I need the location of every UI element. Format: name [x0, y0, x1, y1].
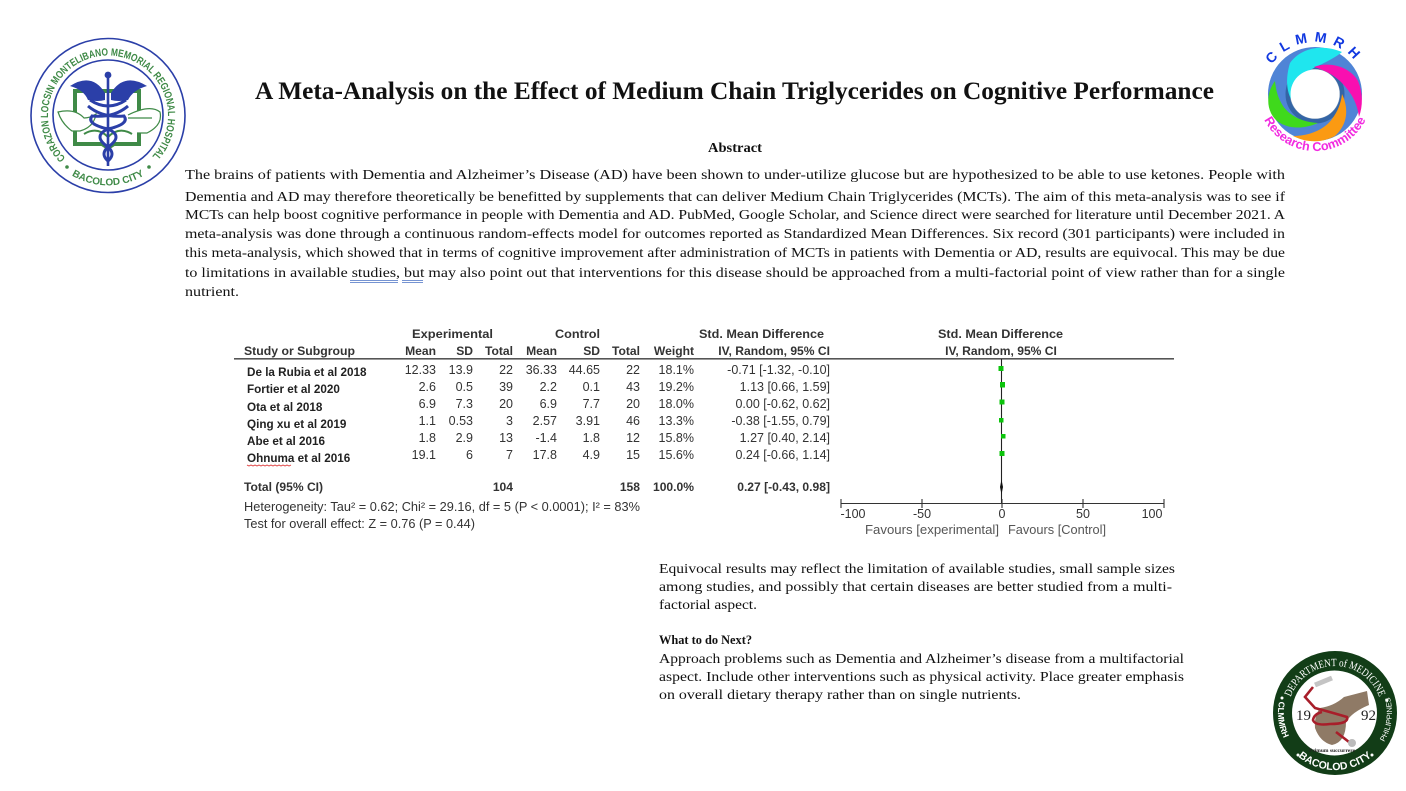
logo: department of medicine: 92 [1361, 708, 1376, 724]
study rows: 6 [466, 448, 473, 462]
total row: 100.0% [653, 480, 694, 494]
study rows: Ota et al 2018 [247, 401, 323, 414]
abstract text: nutrient. [185, 284, 239, 299]
study rows: 20 [626, 397, 640, 411]
study rows: 19.1 [412, 448, 436, 462]
what to do next text: Approach problems such as Dementia and Alzheimer’s disease from a multifactorial [659, 651, 1184, 666]
study rows: 7.7 [583, 397, 600, 411]
study rows: 2.57 [533, 414, 557, 428]
study rows: 3 [506, 414, 513, 428]
study rows: 39 [499, 380, 513, 394]
dept top text: DEPARTMENT of MEDICINE [1284, 658, 1386, 697]
study rows: 2.2 [540, 380, 557, 394]
study rows: 6.9 [419, 397, 436, 411]
abstract text: meta-analysis was done through a continuous random-effects model for outcomes reported as Standardized Mean Differences. Six record (301 participants) were included in [185, 226, 1285, 242]
seal caduceus [70, 76, 147, 166]
title: A Meta-Analysis on the Effect of Medium Chain Triglycerides on Cognitive Performance [255, 78, 1214, 105]
dept left text: CLMMRH [1278, 702, 1289, 738]
study rows: Abe et al 2016 [247, 435, 325, 448]
abstract text: MCTs can help boost cognitive performance in people with Dementia and AD. PubMed, Google Scholar, and Science direct were searched for literature until December 2021. A [185, 207, 1285, 222]
seal mortar [128, 109, 160, 133]
study rows: 13.9 [449, 363, 473, 377]
forest plot table: Control [555, 327, 600, 341]
study rows: 1.1 [419, 414, 436, 428]
axis [841, 499, 1164, 508]
heterogeneity note: Heterogeneity: Tau² = 0.62; Chi² = 29.16, df = 5 (P < 0.0001); I² = 83% [244, 500, 640, 514]
study rows: 44.65 [569, 363, 600, 377]
study rows: 22 [626, 363, 640, 377]
study rows: Qing xu et al 2019 [247, 418, 347, 431]
study rows: 19.2% [659, 380, 694, 394]
study rows: -0.71 [-1.32, -0.10] [727, 363, 830, 377]
forest plot table: Std. Mean Difference [938, 327, 1063, 341]
study rows: 18.1% [659, 363, 694, 377]
total row: Total (95% CI) [244, 480, 323, 494]
interpretation text: Equivocal results may reflect the limitation of available studies, small sample sizes [659, 561, 1175, 576]
abstract text: to limitations in available studies, but may also point out that interventions for this disease should be approached from a multi-factorial point of view rather than for a single [185, 265, 1285, 280]
interpretation text: factorial aspect. [659, 597, 757, 612]
study rows: De la Rubia et al 2018 [247, 366, 367, 379]
seal lamp [58, 111, 96, 131]
study rows: 20 [499, 397, 513, 411]
study rows: 2.6 [419, 380, 436, 394]
study rows: 13.3% [659, 414, 694, 428]
orange segment [1293, 94, 1346, 141]
study rows: 0.1 [583, 380, 600, 394]
study rows: 36.33 [526, 363, 557, 377]
forest plot table [234, 327, 1174, 531]
pooled diamond [1000, 480, 1003, 494]
total row: 158 [620, 480, 640, 494]
seal city text: BACOLOD CITY [72, 169, 142, 186]
study rows: 0.5 [456, 380, 473, 394]
study rows: Fortier et al 2020 [247, 383, 340, 396]
study rows: 18.0% [659, 397, 694, 411]
logo: hospital seal [30, 38, 186, 194]
axis labels: 50 [1076, 507, 1090, 521]
axis labels: 100 [1142, 507, 1162, 521]
hands [1315, 691, 1369, 745]
axis labels: 0 [999, 507, 1006, 521]
interpretation text: among studies, and possibly that certain diseases are better studied from a multi- [659, 579, 1172, 594]
study rows: 1.8 [419, 431, 436, 445]
axis labels: -100 [840, 507, 866, 521]
study rows: Ohnuma et al 2016 [247, 452, 351, 465]
study rows: 15 [626, 448, 640, 462]
what to do next heading: What to do Next? [659, 632, 752, 647]
study rows: 12 [626, 431, 640, 445]
forest plot table: Std. Mean Difference [699, 327, 824, 341]
cyan segment [1287, 48, 1342, 99]
overall effect note: Test for overall effect: Z = 0.76 (P = 0.44) [244, 517, 475, 531]
abstract text [185, 167, 1285, 299]
abstract text: The brains of patients with Dementia and Alzheimer’s Disease (AD) have been shown to under-utilize glucose but are hypothesized to be able to use ketones. People with [185, 167, 1285, 183]
green segment [1268, 81, 1318, 128]
abstract heading: Abstract [708, 140, 763, 155]
total row [244, 480, 830, 494]
total row: 104 [493, 480, 513, 494]
favours labels: Favours [experimental] [865, 523, 999, 537]
study rows: 17.8 [533, 448, 557, 462]
axis labels [840, 507, 1162, 521]
column headers: Weight [654, 344, 694, 358]
favours labels [865, 523, 1106, 537]
abstract text: Dementia and AD may therefore theoretically be benefitted by supplements that can deliver Medium Chain Triglycerides (MCTs). The aim of this meta-analysis was to see if [185, 189, 1285, 205]
forest plot chart [840, 359, 1164, 537]
column headers: SD [456, 344, 473, 358]
column headers: Mean [526, 344, 557, 358]
motto: Primum succurrere [1309, 748, 1356, 754]
study rows: 0.00 [-0.62, 0.62] [735, 397, 830, 411]
study rows: 15.8% [659, 431, 694, 445]
study rows: 43 [626, 380, 640, 394]
CLMMRH text: CLMMRH [1266, 32, 1360, 62]
column headers: Total [485, 344, 513, 358]
study rows: 0.53 [449, 414, 473, 428]
dept right text: PHILIPPINES [1380, 698, 1392, 742]
Research Committee text: Research Committee [1264, 116, 1365, 152]
what to do next text: aspect. Include other interventions such as physical activity. Place greater emphasis [659, 669, 1184, 684]
what to do next text: on overall dietary therapy rather than on single nutrients. [659, 687, 1021, 702]
abstract text: this meta-analysis, which showed that in terms of cognitive improvement after administration of MCTs in patients with Dementia or AD, results are equivocal. This may be due [185, 245, 1285, 260]
group headers: Experimental [412, 327, 493, 341]
study rows: 4.9 [583, 448, 600, 462]
column headers: IV, Random, 95% CI [718, 344, 830, 358]
study rows: 2.9 [456, 431, 473, 445]
column headers: Total [612, 344, 640, 358]
column headers [244, 344, 1057, 358]
stethoscope [1305, 687, 1349, 742]
study markers [998, 366, 1006, 456]
study rows: 1.13 [0.66, 1.59] [740, 380, 830, 394]
study rows: 1.27 [0.40, 2.14] [740, 431, 830, 445]
study rows: 3.91 [576, 414, 600, 428]
dept bottom text: BACOLOD CITY [1298, 750, 1370, 770]
study rows: 13 [499, 431, 513, 445]
study rows: 12.33 [405, 363, 436, 377]
study rows: 7.3 [456, 397, 473, 411]
study rows: 1.8 [583, 431, 600, 445]
study rows: 7 [506, 448, 513, 462]
favours labels: Favours [Control] [1008, 523, 1106, 537]
study rows: -0.38 [-1.55, 0.79] [731, 414, 830, 428]
column headers: Study or Subgroup [244, 344, 355, 358]
interpretation text [659, 561, 1175, 612]
study rows: 15.6% [659, 448, 694, 462]
study rows: 22 [499, 363, 513, 377]
total row: 0.27 [-0.43, 0.98] [737, 480, 830, 494]
column headers: SD [583, 344, 600, 358]
seal book [75, 91, 139, 148]
logo: research committee [1264, 32, 1365, 152]
study rows: 6.9 [540, 397, 557, 411]
logo: department of medicine [1273, 651, 1397, 775]
year: 19 [1296, 708, 1311, 724]
study rows: 46 [626, 414, 640, 428]
study rows [247, 363, 830, 465]
study rows: -1.4 [535, 431, 557, 445]
magenta segment [1314, 65, 1362, 117]
column headers: IV, Random, 95% CI [945, 344, 1057, 358]
what to do next text [659, 651, 1184, 702]
axis labels: -50 [913, 507, 931, 521]
column headers: Mean [405, 344, 436, 358]
seal ring text: CORAZON LOCSIN MONTELIBANO MEMORIAL REGIONAL HOSPITAL [40, 48, 176, 162]
study rows: 0.24 [-0.66, 1.14] [735, 448, 830, 462]
